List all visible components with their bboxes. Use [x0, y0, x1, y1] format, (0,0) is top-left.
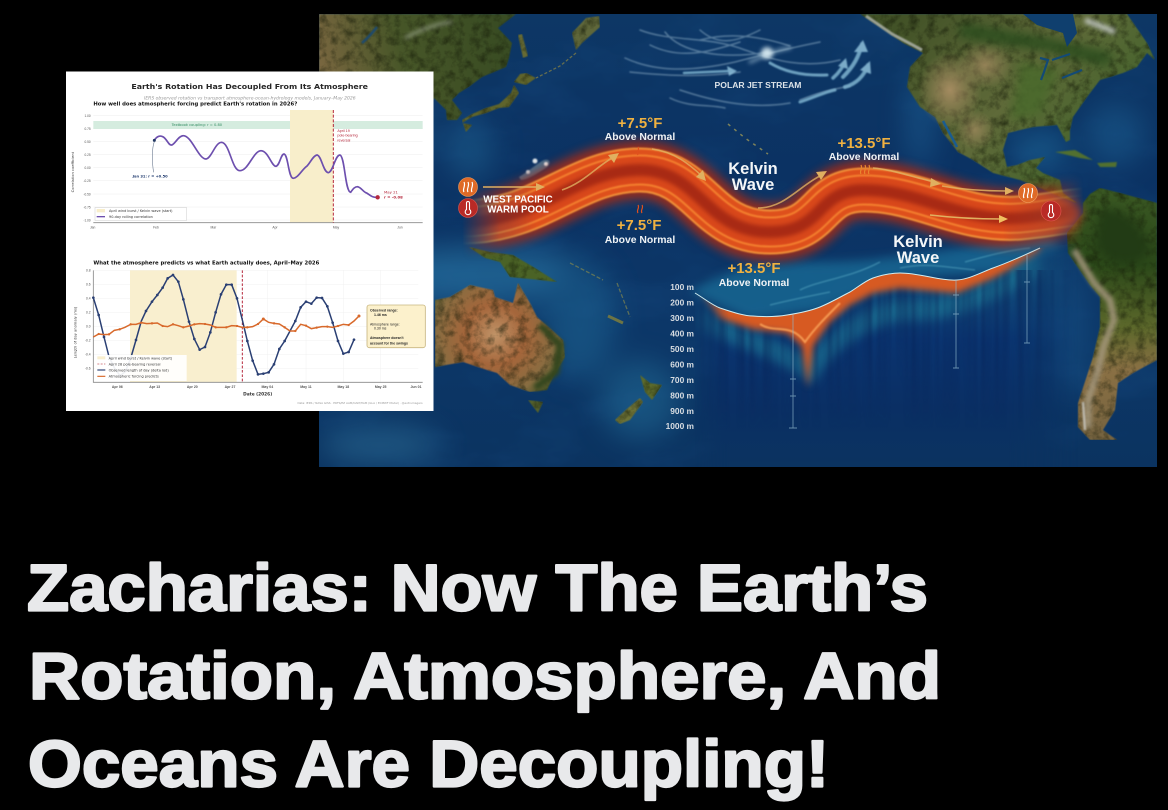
- depth probes: [789, 255, 1030, 428]
- Rockies snow: [866, 16, 922, 50]
- date labels: May 04: [262, 385, 273, 389]
- top chart heading: How well does atmospheric forcing predict Earth's rotation in 2026?: [93, 101, 297, 107]
- rolling correlation line: [154, 136, 378, 197]
- date labels: Jun 01: [410, 385, 422, 389]
- depth scale labels: 700 m: [670, 375, 694, 385]
- y axis title: Length of day anomaly (ms): [74, 306, 78, 358]
- April 19 label: reversal: [337, 139, 351, 143]
- callout: +7.5F upper: +7.5°F: [618, 115, 662, 132]
- label: Kelvin Wave lower: [893, 233, 943, 267]
- y tick labels: 1.00: [85, 114, 91, 118]
- panel: chart card: [66, 72, 434, 411]
- label: warm pool second line: WARM POOL: [487, 204, 549, 216]
- y tick labels: -0.75: [83, 205, 91, 209]
- warm tail at South American coast: [998, 194, 1082, 234]
- y tick labels: -0.4: [85, 353, 91, 357]
- label: Kelvin Wave lower: Wave: [897, 249, 939, 267]
- shallow-water glows: [320, 70, 1145, 465]
- depth scale labels: 900 m: [670, 406, 694, 416]
- y tick labels: 0.00: [85, 166, 91, 170]
- y tick labels: 0.6: [86, 283, 91, 287]
- panel: Pacific ocean map: [319, 14, 1157, 470]
- Hudson Bay: [1023, 14, 1077, 47]
- teal transition: [695, 262, 1040, 370]
- headline: [27, 550, 941, 800]
- jet stream arrows: [684, 40, 871, 102]
- label: Kelvin Wave upper: [728, 160, 778, 194]
- callout: +7.5F upper: Above Normal: [605, 132, 675, 143]
- gridlines: [93, 116, 423, 220]
- bottom chart legend: Atmospheric forcing predicts: [109, 375, 159, 379]
- heat marks on wave: [637, 147, 870, 213]
- depth scale labels: 100 m: [670, 282, 694, 292]
- callout: +7.5F lower: [605, 217, 675, 246]
- warm orange layer: [695, 240, 1040, 388]
- range callout: Atmosphere doesn't: [370, 336, 404, 340]
- land: East Asia: [319, 14, 516, 130]
- ocean cross-section: thermocline: [698, 244, 1072, 430]
- Siberian snow: [405, 22, 452, 38]
- yellow highlight period: [290, 110, 333, 223]
- y axis title: Correlation coefficient: [71, 151, 75, 192]
- y tick labels: -1.00: [83, 218, 91, 222]
- bottom chart: [74, 260, 425, 405]
- band label: Textbook coupling: r = 0.80: [171, 123, 223, 127]
- bottom chart heading: What the atmosphere predicts vs what Earth actually does, April–May 2026: [93, 260, 320, 266]
- headline: Rotation, Atmosphere, And: [29, 638, 941, 712]
- bottom chart legend: Observed length of day (delta lod): [109, 368, 169, 372]
- Jan 31 annotation: [132, 139, 168, 179]
- icon: heat east: [1018, 184, 1038, 202]
- Arctic snow: [1085, 20, 1115, 32]
- top chart legend: 90-day rolling correlation: [109, 215, 153, 219]
- range callout: 0.30 ms: [374, 327, 387, 331]
- bottom chart legend: April 28 pole-bearing reversal: [109, 362, 160, 366]
- jet stream swirls: [625, 30, 850, 108]
- label: West Pacific warm pool: WEST PACIFIC: [483, 194, 553, 206]
- depth scale labels: 300 m: [670, 313, 694, 323]
- Lake Baikal: [362, 27, 377, 43]
- May 21 annotation: [375, 190, 403, 200]
- range callout: Atmosphere range:: [370, 322, 400, 326]
- y tick labels: 0.50: [85, 140, 91, 144]
- callout: +13.5F upper: [829, 135, 899, 163]
- April 19 label: pole-bearing: [337, 134, 358, 138]
- y tick labels: -0.25: [83, 179, 91, 183]
- bright jet core: [761, 47, 773, 59]
- observed length of day line: [92, 274, 355, 376]
- eastern forests: [1012, 61, 1056, 121]
- depth scale labels: 200 m: [670, 298, 694, 308]
- month labels: Jan: [90, 226, 95, 230]
- bright veins: [760, 303, 840, 342]
- range callout: Observed range:: [370, 308, 398, 312]
- y tick labels: 0.75: [85, 127, 91, 131]
- callout: +13.5F upper: +13.5°F: [837, 135, 891, 152]
- ocean cloud texture: [319, 14, 1157, 467]
- callout: +7.5F lower: +7.5°F: [617, 217, 661, 234]
- depth scale labels: 400 m: [670, 328, 694, 338]
- Jan 31 annotation: Jan 31: r = +0.50: [132, 175, 168, 179]
- Cuba and Hispaniola: [1055, 150, 1117, 167]
- callout: +13.5F lower: [719, 260, 789, 289]
- gridlines: [93, 270, 418, 382]
- April 19 label: [337, 129, 358, 143]
- callout: +13.5F lower: +13.5°F: [727, 260, 781, 277]
- callout: +13.5F upper: Above Normal: [829, 152, 899, 163]
- shelf wisps: [770, 248, 1030, 305]
- April 19 marker: [332, 110, 335, 223]
- month labels: Feb: [153, 226, 159, 230]
- western US desert: [920, 55, 979, 124]
- chart header and top chart: [71, 82, 423, 230]
- depth streaks: [711, 270, 1043, 378]
- depth scale labels: 1000 m: [666, 421, 694, 431]
- deep water column: [772, 244, 1072, 428]
- date labels: [112, 385, 422, 389]
- chart title: Earth's Rotation Has Decoupled From Its Atmosphere: [131, 82, 368, 91]
- land: South America: [1067, 188, 1157, 440]
- icon: thermometer west: [458, 198, 478, 218]
- range callout: 1.46 ms: [374, 313, 387, 317]
- headline: Oceans Are Decoupling!: [28, 726, 829, 800]
- y tick labels: [85, 269, 91, 371]
- callout: +13.5F lower: Above Normal: [719, 278, 789, 289]
- April 19 label: April 19: [337, 129, 350, 133]
- land: Japan, Sakhalin, Kamchatka: [462, 16, 600, 132]
- icon: thermometer east: [1041, 201, 1061, 221]
- Great Lakes: [1040, 54, 1082, 80]
- month labels: May: [333, 226, 339, 230]
- ocean base: [319, 14, 1157, 467]
- atmospheric forcing line: [93, 314, 360, 337]
- Kelvin wave band: [462, 170, 1084, 232]
- date labels: May 11: [300, 385, 312, 389]
- y tick labels: 0.2: [86, 311, 91, 315]
- y tick labels: -0.2: [85, 339, 91, 343]
- depth scale labels: 500 m: [670, 344, 694, 354]
- y tick labels: -0.50: [83, 192, 91, 196]
- headline: Zacharias: Now The Earth’s: [27, 550, 928, 624]
- y tick labels: 0.4: [86, 297, 91, 301]
- island cluster: Philippine Sea clouds: [519, 158, 550, 180]
- thermocline surface line: [695, 248, 1040, 317]
- land: North America: [860, 14, 1155, 203]
- date labels: Apr 06: [112, 385, 123, 389]
- flow arrows: [483, 149, 1014, 223]
- label: Kelvin Wave lower: Kelvin: [893, 233, 943, 251]
- callout: +7.5F lower: Above Normal: [605, 235, 675, 246]
- Hawaiian islands: [728, 124, 768, 154]
- Andes: [1074, 250, 1114, 428]
- range callout: account for the swings: [370, 341, 408, 345]
- April 28 marker: [241, 270, 244, 382]
- date labels: Apr 20: [187, 385, 198, 389]
- date labels: May 25: [375, 385, 387, 389]
- axes: [93, 270, 423, 382]
- y tick labels: [83, 114, 91, 222]
- May 21 annotation: r = -0.08: [384, 195, 403, 200]
- icon: heat west: [458, 178, 478, 196]
- label: jet stream: POLAR JET STREAM: [715, 80, 801, 90]
- May 21 annotation: May 21: [384, 190, 399, 195]
- depth scale labels: 800 m: [670, 390, 694, 400]
- data source footer: Data: IERS / NASA GISS · ERFS/EZ AAM/OAM/HAM (GLA / ECMWF Model) · @eotrumagers: [297, 401, 423, 405]
- y tick labels: 0.0: [86, 325, 91, 329]
- x axis title: Date (2026): [243, 391, 272, 397]
- yellow highlight period: [130, 270, 237, 382]
- bottom chart legend: April wind burst / Kelvin wave (start): [109, 356, 173, 360]
- chart subtitle: IERS observed rotation vs transport atmosphere-ocean-hydrology models, January–May 2026: [144, 96, 356, 101]
- month labels: [90, 226, 403, 230]
- y tick labels: 0.25: [85, 153, 91, 157]
- top chart legend: April wind burst / Kelvin wave (start): [109, 209, 173, 213]
- y tick labels: 0.8: [86, 269, 91, 273]
- land: Australia, Papua, New Zealand: [435, 247, 662, 424]
- date labels: May 18: [338, 385, 349, 389]
- light shelf above thermocline: [692, 237, 1060, 316]
- x axis: [93, 221, 423, 224]
- label: Kelvin Wave upper: Wave: [732, 176, 774, 194]
- depth scale labels: [666, 282, 694, 431]
- range callout: [367, 305, 425, 348]
- label: Kelvin Wave upper: Kelvin: [728, 160, 778, 178]
- date labels: Apr 13: [149, 385, 160, 389]
- Gulf of California: [943, 121, 957, 147]
- date labels: Apr 27: [225, 385, 235, 389]
- top chart legend: [95, 208, 187, 220]
- y tick labels: -0.6: [85, 367, 91, 371]
- month labels: Mar: [210, 226, 217, 230]
- callout: +7.5F upper: [605, 115, 675, 143]
- month labels: Jun: [397, 226, 403, 230]
- depth scale labels: 600 m: [670, 360, 694, 370]
- bottom chart legend: [95, 355, 187, 381]
- month labels: Apr: [272, 226, 278, 230]
- green coupling band: [93, 121, 423, 129]
